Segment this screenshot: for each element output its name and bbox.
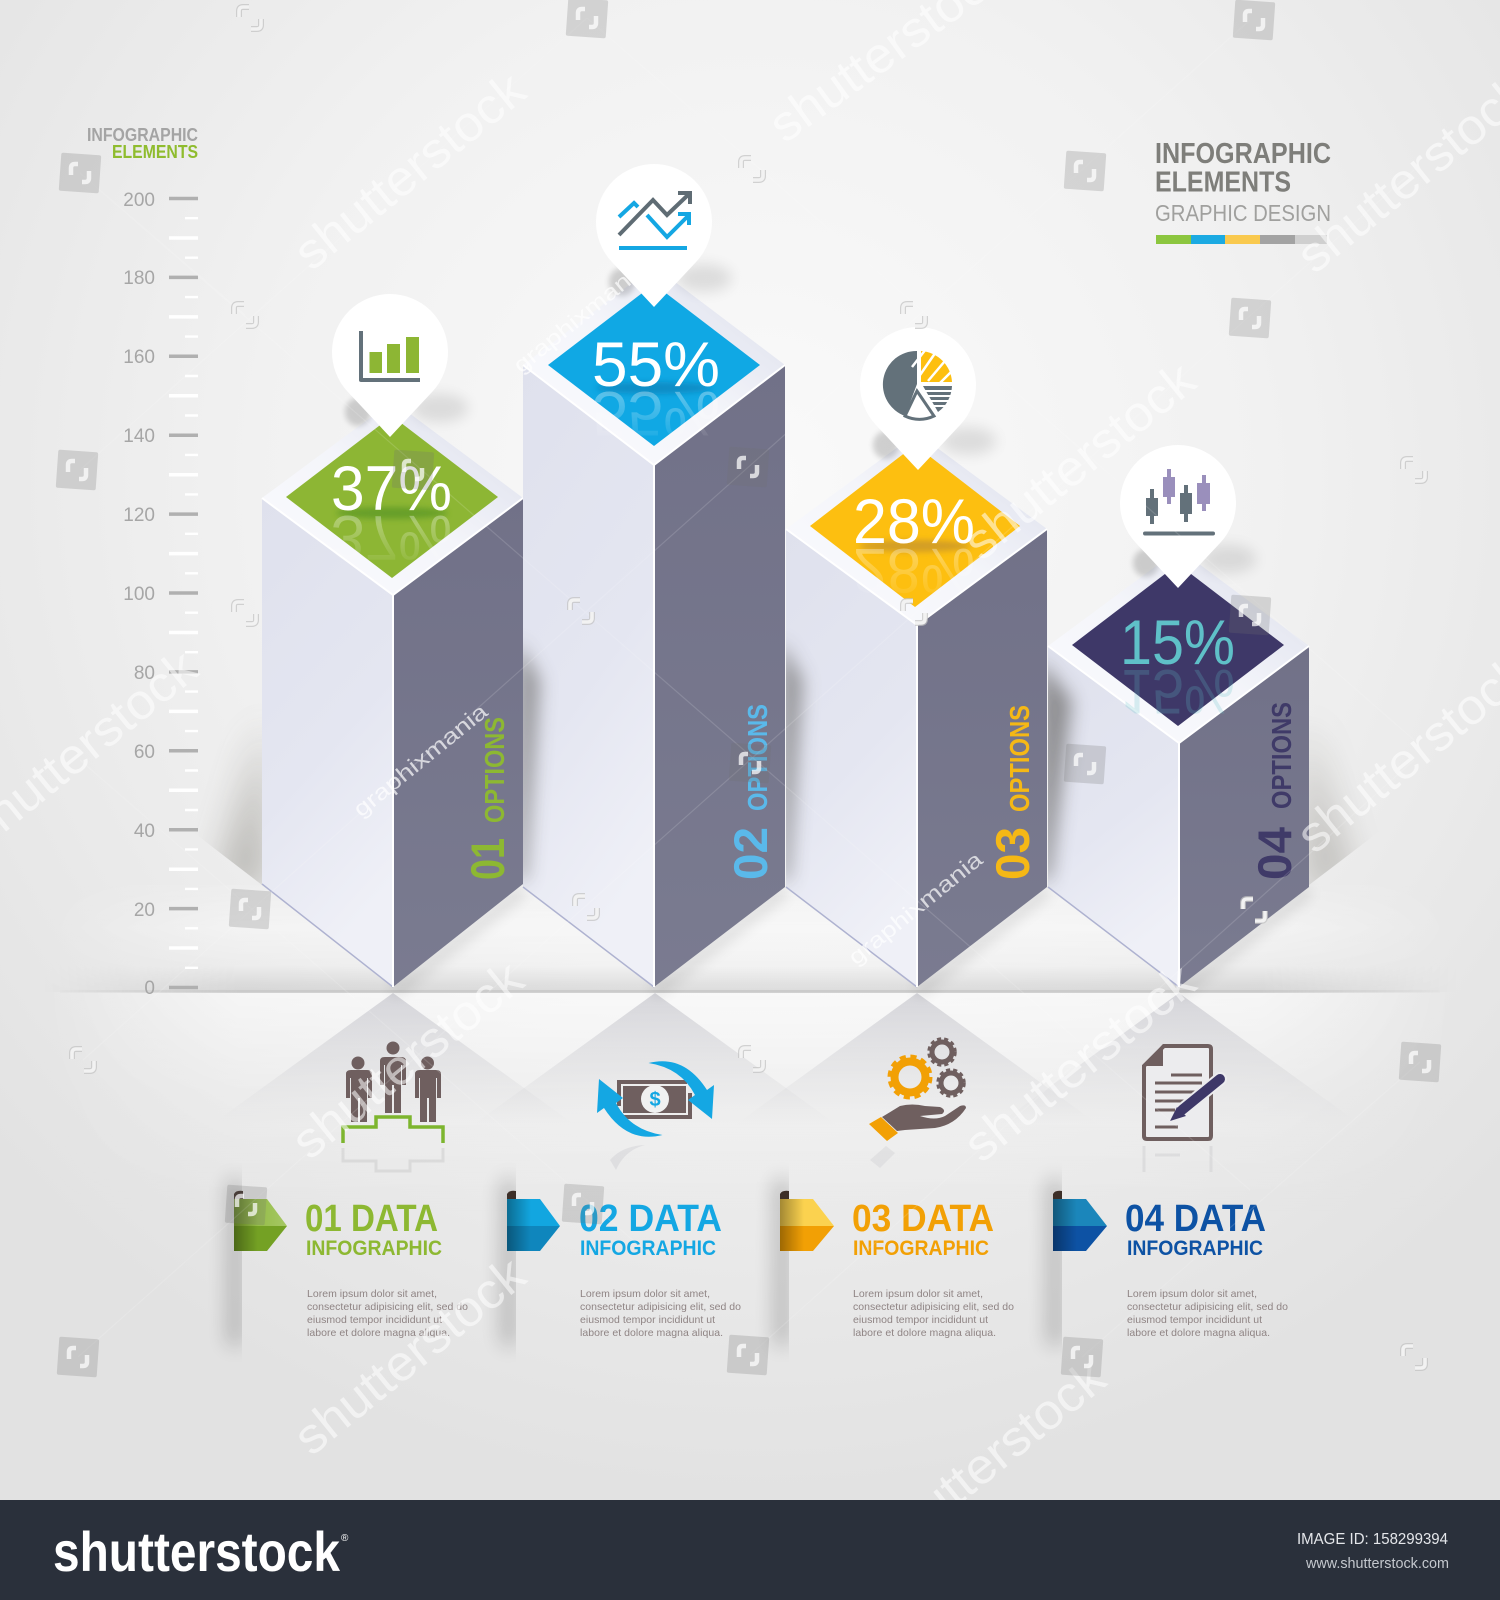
diamond 37% (286, 416, 498, 578)
stock watermarks: shutterstock (953, 350, 1207, 571)
body text 2: consectetur adipisicing elit, sed do (580, 1301, 741, 1313)
pin 4: candlestick icon (1120, 445, 1256, 588)
bar 2: 55%: 55% (592, 378, 720, 448)
bar 3: 28% (780, 433, 1047, 987)
bar 1: 37% (262, 401, 523, 987)
body text 2: labore et dolore magna aliqua. (580, 1327, 723, 1339)
icon: team on podium (343, 1042, 443, 1171)
fold chevrons under the bars (211, 993, 1361, 1125)
value 55%: 55% (592, 330, 720, 400)
heading: infographic elements (1155, 138, 1331, 244)
body text 3: eiusmod tempor incididunt ut (853, 1314, 988, 1326)
footer bar (0, 1500, 1500, 1600)
data block 1: 01 DATA (305, 1198, 438, 1240)
data block 3: 03 DATA (852, 1198, 994, 1240)
pin 2: line chart icon (596, 164, 732, 307)
pin 3: pie chart icon (860, 327, 996, 470)
icon: line chart (619, 193, 690, 248)
body text 1 (307, 1288, 468, 1339)
value 15%: 15% (1120, 608, 1235, 678)
scale axis 0–200: 180 (123, 268, 155, 289)
data block 3: INFOGRAPHIC (853, 1237, 989, 1260)
stock watermarks: shutterstock (283, 60, 537, 281)
body text 1: eiusmod tempor incididunt ut (307, 1314, 442, 1326)
diamond 55% (548, 284, 760, 446)
body text 4: labore et dolore magna aliqua. (1127, 1327, 1270, 1339)
data block 1: INFOGRAPHIC (306, 1237, 442, 1260)
options label 01: OPTIONS (479, 717, 510, 823)
scale axis 0–200 (123, 190, 198, 999)
stock watermarks: shutterstock (283, 1245, 537, 1466)
options label 03: OPTIONS (1004, 705, 1035, 812)
value 28%: 28% (853, 487, 975, 557)
colour strip (1156, 235, 1327, 244)
body text 3 (853, 1288, 1014, 1339)
axis title (87, 124, 198, 162)
scale axis 0–200: 120 (123, 505, 155, 526)
stock watermarks: graphixmania (348, 698, 493, 822)
lower floor highlight (184, 993, 1316, 1036)
icon: money exchange (597, 1061, 714, 1170)
data block 2 (507, 1191, 741, 1339)
options label 04: OPTIONS (1266, 702, 1297, 809)
body text 4: eiusmod tempor incididunt ut (1127, 1314, 1262, 1326)
scale axis 0–200: 160 (123, 347, 155, 368)
options label 01: 01 (461, 838, 514, 880)
data block 1 (234, 1191, 468, 1339)
bar 3: 28%: 28% (853, 535, 975, 605)
body text 3: labore et dolore magna aliqua. (853, 1327, 996, 1339)
options label 04 (1248, 702, 1301, 880)
wall shadows behind the bars (215, 720, 1356, 890)
options label 01 (461, 717, 514, 880)
arrow tag 2 (507, 1191, 560, 1251)
body text 2 (580, 1288, 741, 1339)
stock watermarks: graphixmania (843, 846, 988, 970)
options label 04: 04 (1248, 827, 1301, 880)
data block 4: INFOGRAPHIC (1127, 1237, 1263, 1260)
bar 4: 15% (1040, 549, 1309, 987)
stock watermarks: graphixmania (508, 254, 653, 378)
data block 2: INFOGRAPHIC (580, 1237, 716, 1260)
body text 1: Lorem ipsum dolor sit amet, (307, 1288, 437, 1300)
icon: money exchange: $ (649, 1089, 661, 1111)
scale axis 0–200: 200 (123, 190, 155, 211)
panel fold shadows (228, 1180, 1062, 1345)
scale axis 0–200: 140 (123, 426, 155, 447)
horizon line (60, 990, 1440, 993)
footer logo: shutterstock (53, 1520, 341, 1583)
icon: pie chart (883, 349, 956, 419)
bar 1: 37%: 37% (331, 502, 452, 572)
arrow tag 3 (780, 1191, 834, 1251)
pin 1: bar chart icon (332, 294, 468, 437)
icon: gears on hand (869, 1039, 966, 1168)
body text 3: Lorem ipsum dolor sit amet, (853, 1288, 983, 1300)
bar 4: 15%: 15% (1120, 656, 1235, 726)
arrow tag 4 (1053, 1191, 1107, 1251)
value 37%: 37% (331, 454, 452, 524)
icon: document and pen (1143, 1044, 1220, 1172)
scale axis 0–200: 100 (123, 584, 155, 605)
options label 02: 02 (724, 827, 777, 880)
registered mark: ® (341, 1533, 349, 1544)
axis title: ELEMENTS (112, 141, 198, 162)
data block 3 (780, 1191, 1014, 1339)
image id: IMAGE ID: 158299394 (1297, 1531, 1448, 1548)
scale axis 0–200: 40 (134, 821, 155, 842)
icon: candlesticks (1143, 469, 1215, 536)
stock watermarks: shutterstock (953, 952, 1207, 1173)
body text 2: Lorem ipsum dolor sit amet, (580, 1288, 710, 1300)
diamond 28% (810, 445, 1020, 607)
body text 3: consectetur adipisicing elit, sed do (853, 1301, 1014, 1313)
body text 4 (1127, 1288, 1288, 1339)
options label 03 (986, 705, 1039, 880)
scale axis 0–200: 60 (134, 742, 155, 763)
heading: infographic elements: GRAPHIC DESIGN (1155, 200, 1331, 226)
data block 2: 02 DATA (579, 1198, 722, 1240)
options label 02: OPTIONS (742, 704, 773, 811)
data block 4 (1053, 1191, 1288, 1339)
body text 1: consectetur adipisicing elit, sed do (307, 1301, 468, 1313)
options label 02 (724, 704, 777, 880)
icon: bar chart (361, 331, 420, 380)
arrow tag 1 (234, 1191, 287, 1251)
body text 2: eiusmod tempor incididunt ut (580, 1314, 715, 1326)
bar 2: 55% (517, 266, 785, 987)
scale axis 0–200: 80 (134, 663, 155, 684)
options label 03: 03 (986, 827, 1039, 880)
scale axis 0–200: 0 (144, 978, 155, 999)
data block 4: 04 DATA (1125, 1198, 1266, 1240)
body text 1: labore et dolore magna aliqua. (307, 1327, 450, 1339)
axis title: INFOGRAPHIC (87, 124, 198, 145)
stock watermarks: shutterstock (281, 949, 535, 1170)
floor contact shadows (393, 890, 1309, 992)
body text 4: Lorem ipsum dolor sit amet, (1127, 1288, 1257, 1300)
stock watermarks: shutterstock (863, 1348, 1117, 1569)
diamond 15% (1072, 564, 1284, 726)
heading: infographic elements: ELEMENTS (1155, 166, 1291, 198)
body text 4: consectetur adipisicing elit, sed do (1127, 1301, 1288, 1313)
site url: www.shutterstock.com (1305, 1555, 1449, 1572)
floor band (122, 975, 1378, 990)
heading: infographic elements: INFOGRAPHIC (1155, 138, 1331, 170)
scale axis 0–200: 20 (134, 900, 155, 921)
